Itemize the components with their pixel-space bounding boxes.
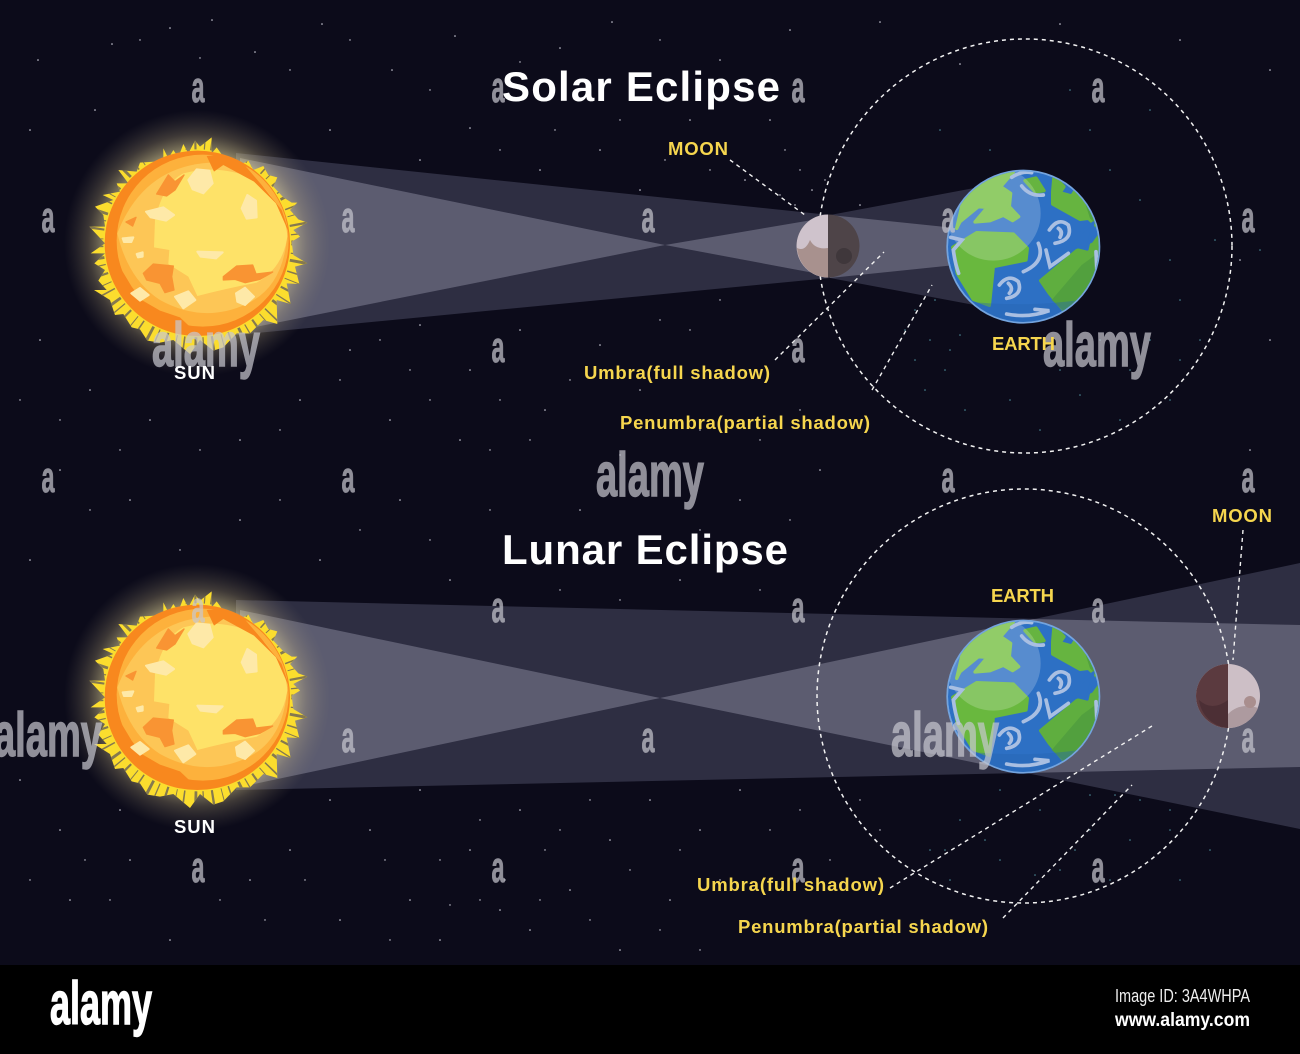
watermarks: a (342, 713, 355, 762)
footer image id: Image ID: 3A4WHPA (1115, 986, 1250, 1006)
label: sun, solar eclipse: SUN (174, 362, 215, 383)
watermarks: a (1092, 63, 1105, 112)
watermarks: a (1242, 453, 1255, 502)
labels: lunar eclipse (697, 505, 1272, 937)
watermarks: a (1092, 583, 1105, 632)
labels: solar eclipse: EARTH (992, 333, 1055, 354)
watermarks: a (642, 713, 655, 762)
leader lines (730, 160, 1243, 918)
solar eclipse shadow cones (236, 153, 985, 335)
umbra, moon to earth (830, 215, 965, 278)
labels: solar eclipse: Penumbra(partial shadow) (620, 412, 870, 433)
watermarks: a (642, 193, 655, 242)
umbra wedge, crossing to moon (665, 217, 830, 276)
watermarks: alamy (891, 701, 999, 770)
watermarks: a (342, 453, 355, 502)
watermarks: a (942, 453, 955, 502)
watermarks: a (342, 193, 355, 242)
umbra wedge, sun to crossing (240, 158, 665, 330)
sun, solar eclipse (64, 110, 331, 377)
watermarks: a (42, 453, 55, 502)
watermarks: a (1242, 713, 1255, 762)
penumbra flare behind earth (660, 563, 1300, 829)
watermarks: a (42, 193, 55, 242)
watermarks: a (192, 583, 205, 632)
watermarks: a (792, 583, 805, 632)
labels: lunar eclipse: Penumbra(partial shadow) (738, 916, 988, 937)
earth, lunar eclipse (946, 616, 1103, 823)
sun, lunar eclipse (64, 564, 331, 831)
watermarks: a (492, 843, 505, 892)
watermarks: a (492, 63, 505, 112)
labels: solar eclipse: MOON (668, 138, 728, 159)
labels: lunar eclipse: EARTH (991, 585, 1054, 606)
watermarks: a (942, 193, 955, 242)
watermarks: alamy (1043, 311, 1151, 380)
solar eclipse: orbit of the moon (818, 39, 1232, 453)
footer bar (0, 965, 1300, 1054)
watermarks: a (1092, 843, 1105, 892)
lunar eclipse: orbit of the moon (817, 489, 1231, 903)
labels: lunar eclipse: Umbra(full shadow) (697, 874, 884, 895)
title: solar eclipse: Solar Eclipse (502, 63, 780, 110)
moon, lunar eclipse (1196, 664, 1260, 728)
watermarks: a (792, 843, 805, 892)
watermarks: alamy (596, 441, 704, 510)
watermarks (0, 63, 1255, 892)
footer logo: alamy (50, 970, 152, 1037)
lunar eclipse shadow cones (236, 563, 1300, 829)
penumbra band (236, 600, 1300, 790)
watermarks: a (492, 323, 505, 372)
watermarks: alamy (152, 311, 260, 380)
title: lunar eclipse: Lunar Eclipse (502, 526, 788, 573)
watermarks: a (192, 843, 205, 892)
labels: solar eclipse (584, 138, 1055, 433)
watermarks: a (792, 323, 805, 372)
labels: lunar eclipse: MOON (1212, 505, 1272, 526)
penumbra, moon to earth (830, 186, 985, 307)
watermarks: a (792, 63, 805, 112)
watermarks: a (492, 583, 505, 632)
watermarks: a (1242, 193, 1255, 242)
footer website: www.alamy.com (1114, 1010, 1250, 1031)
umbra wedge, sun side (240, 610, 660, 787)
labels: solar eclipse: Umbra(full shadow) (584, 362, 770, 383)
umbra wedge, earth and moon side (660, 619, 1300, 773)
earth, solar eclipse (946, 166, 1103, 373)
penumbra band, sun to moon (236, 153, 830, 335)
label: sun, lunar eclipse: SUN (174, 816, 215, 837)
moon, solar eclipse (796, 214, 860, 278)
watermarks: a (192, 63, 205, 112)
